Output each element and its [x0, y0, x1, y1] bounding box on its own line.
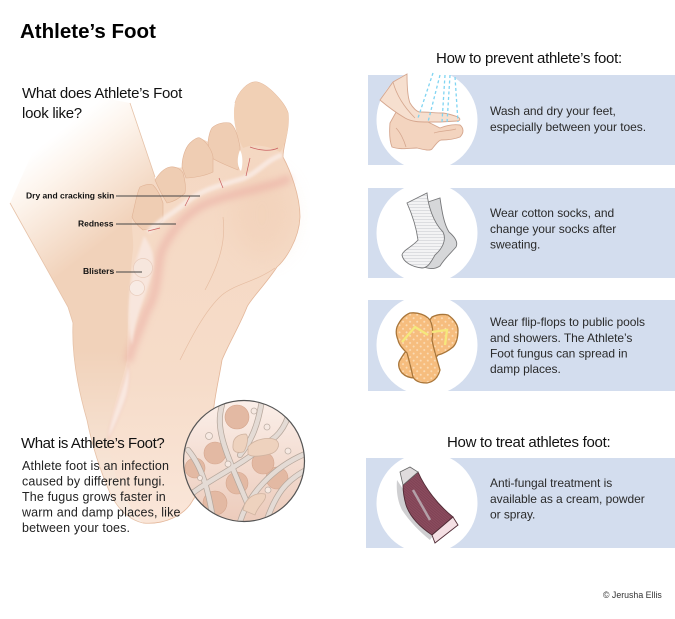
credit: © Jerusha Ellis [603, 590, 662, 600]
lower crack on side of foot [108, 364, 129, 440]
text: anti-fungal: available as a cream, powder [490, 492, 645, 506]
label: what does it look like: look like? [22, 105, 82, 122]
text: cotton socks: Wear cotton socks, and [490, 206, 614, 220]
heading: what is athlete's foot: What is Athlete’s Foot? [21, 435, 164, 452]
heading: treat: How to treat athletes foot: [447, 434, 610, 451]
text: cotton socks: sweating. [490, 238, 540, 252]
title: Athlete’s Foot [20, 20, 156, 43]
panel: wash and dry feet [368, 70, 675, 170]
icon: socks [402, 193, 457, 269]
inset: fungi under magnification [182, 400, 306, 522]
text: wash and dry: Wash and dry your feet, [490, 104, 616, 118]
flaking skin and cracks [148, 155, 282, 232]
callout: blisters: Blisters [83, 266, 114, 276]
sole contour lines [180, 217, 275, 360]
text: flip-flops: damp places. [490, 362, 561, 376]
lower leg and heel [10, 90, 180, 523]
text: what is athlete's foot description: The fugus grows faster in [22, 490, 166, 504]
illustration: foot with athlete's foot [10, 82, 300, 523]
ball shading [232, 173, 292, 257]
heading: prevent: How to prevent athlete’s foot: [436, 50, 622, 67]
text: what is athlete's foot description: warm and damp places, like [21, 506, 181, 520]
text: what is athlete's foot description: Athlete foot is an infection [22, 459, 169, 473]
icon: flip-flops [396, 313, 458, 383]
callout: redness [78, 218, 176, 228]
callout: blisters [83, 266, 142, 276]
label: what does it look like: What does Athlete’s Foot [22, 85, 182, 102]
blisters [129, 236, 153, 345]
callout: dry and cracking skin: Dry and cracking skin [26, 190, 114, 200]
text: anti-fungal: Anti-fungal treatment is [490, 476, 612, 490]
icon: feet under shower [380, 73, 463, 150]
text: what is athlete's foot description: caused by different fungi. [22, 474, 165, 488]
text: flip-flops: and showers. The Athlete’s [490, 331, 632, 345]
toes [234, 82, 288, 152]
callout: redness: Redness [78, 218, 114, 228]
redness band [128, 178, 290, 362]
text: anti-fungal: or spray. [490, 508, 535, 522]
text: flip-flops: Foot fungus can spread in [490, 346, 628, 360]
text: flip-flops: Wear flip-flops to public pools [490, 315, 645, 329]
panel: flip-flops [368, 294, 675, 396]
text: what is athlete's foot description: between your toes. [22, 521, 130, 535]
icon: ointment tube [397, 467, 458, 543]
gap between toes [238, 150, 242, 171]
text: wash and dry: especially between your toes. [490, 120, 646, 134]
text: cotton socks: change your socks after [490, 222, 616, 236]
panel: cotton socks [368, 182, 675, 284]
sole [108, 82, 300, 523]
panel: anti-fungal treatment [366, 452, 675, 554]
